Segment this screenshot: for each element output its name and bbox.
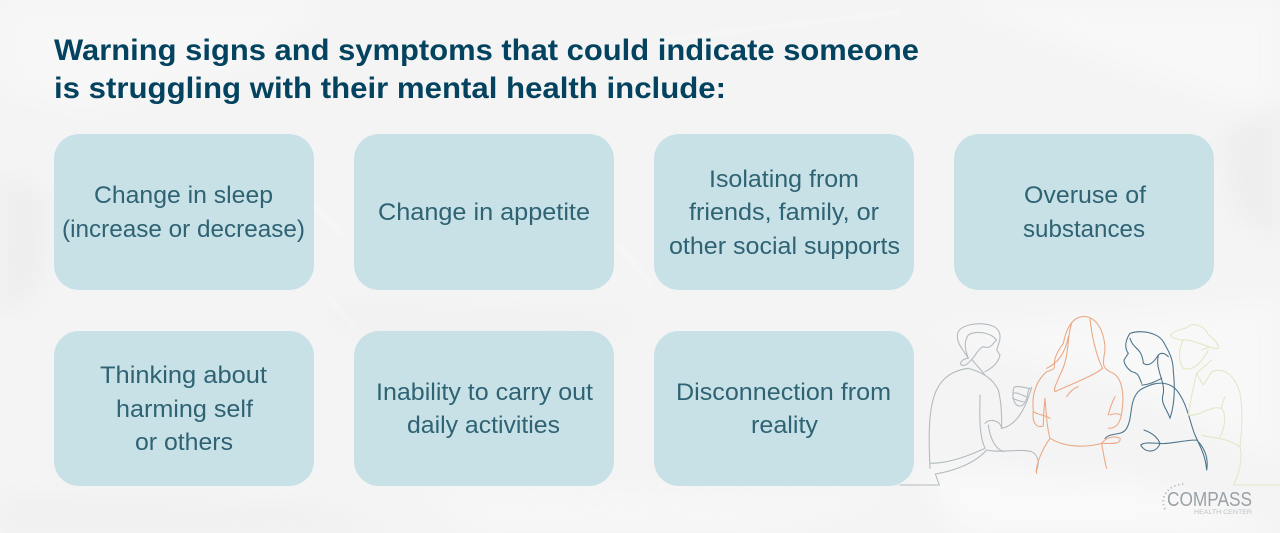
card: change in sleep: (increase or decrease) [62, 216, 305, 243]
logo dots [1163, 484, 1185, 509]
card: thinking about harming: or others [135, 429, 233, 456]
card: isolating: friends, family, or [689, 199, 879, 226]
card: change in sleep [54, 134, 314, 290]
card: thinking about harming: Thinking about [100, 362, 267, 389]
card: overuse of substances: Overuse of [1024, 182, 1146, 209]
card: change in sleep: Change in sleep [94, 182, 273, 209]
card: thinking about harming: harming self [116, 396, 253, 423]
card: overuse of substances [954, 134, 1214, 290]
card: overuse of substances: substances [1023, 216, 1145, 243]
card: inability to carry out: Inability to carry out [376, 379, 593, 406]
logo: Compass Health Center [1163, 484, 1252, 516]
card: thinking about harming [54, 331, 314, 486]
person 2: orange [1033, 317, 1123, 473]
logo: Compass Health Center: COMPASS [1167, 489, 1252, 511]
card: disconnection from reality: reality [751, 412, 818, 439]
card: disconnection from reality [654, 331, 914, 486]
card: isolating: other social supports [669, 233, 900, 260]
title [54, 34, 919, 105]
person 1: grey [900, 324, 1038, 485]
card: isolating [654, 134, 914, 290]
illustration: four people line art [900, 317, 1280, 485]
title: Warning signs and symptoms that could indicate someone [54, 34, 919, 67]
title: is struggling with their mental health include: [54, 72, 726, 105]
person 4: pale green [1171, 325, 1280, 485]
card: inability to carry out [354, 331, 614, 486]
card: isolating: Isolating from [709, 166, 859, 193]
card: disconnection from reality: Disconnection from [676, 379, 891, 406]
card: inability to carry out: daily activities [407, 412, 560, 439]
card: change in appetite: Change in appetite [378, 199, 590, 226]
logo: Compass Health Center: HEALTH CENTER [1194, 509, 1252, 516]
card: change in appetite [354, 134, 614, 290]
person 3: navy [1105, 332, 1207, 470]
